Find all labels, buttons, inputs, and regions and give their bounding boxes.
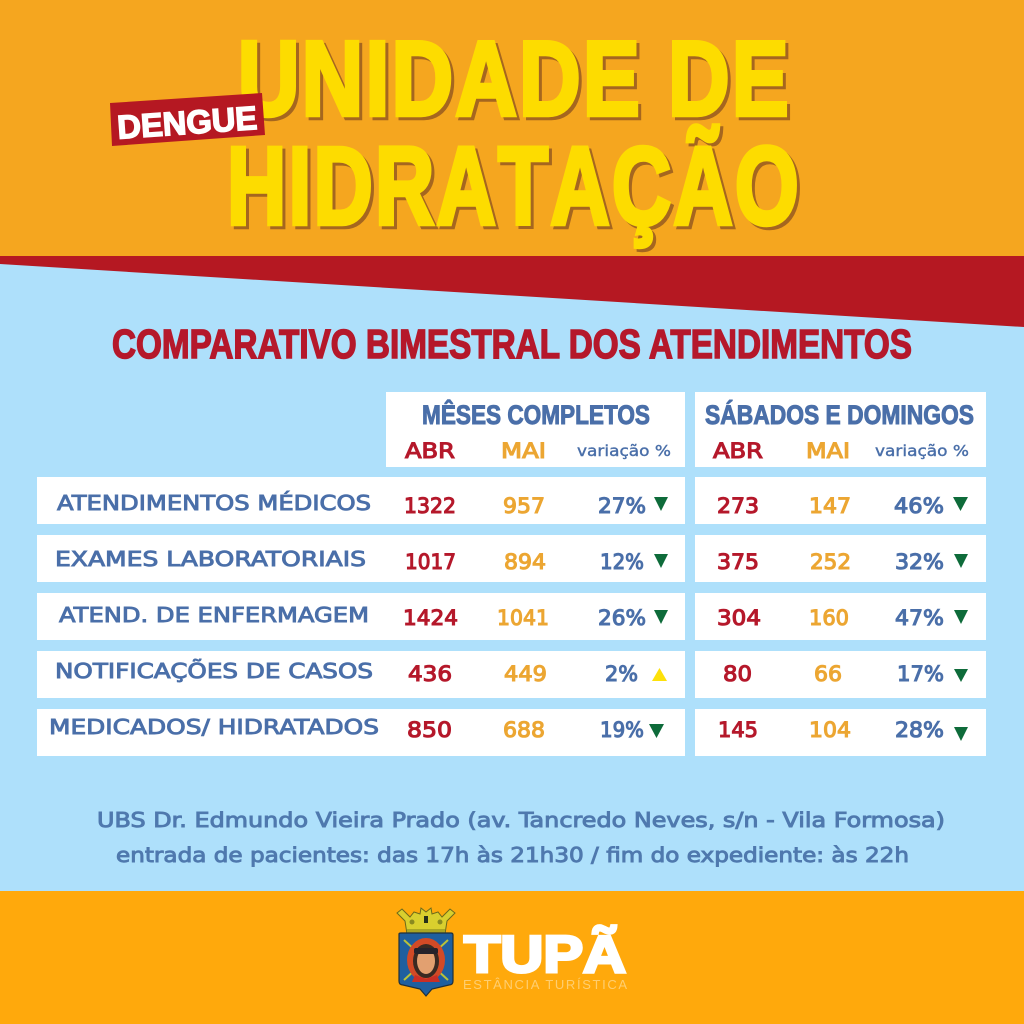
row: exames laboratoriais: 894: [504, 550, 546, 575]
table header: sabados e domingos: ABR: [713, 439, 763, 463]
address text: UBS Dr. Edmundo Vieira Prado (av. Tancredo Neves, s/n - Vila Formosa): [97, 808, 945, 832]
row: notificacoes de casos: 17%: [897, 662, 944, 687]
table header: meses completos: MAI: [501, 439, 546, 463]
row: atend. de enfermagem: 26%: [598, 606, 646, 631]
row: medicados hidratados: 104: [809, 718, 851, 743]
row: exames laboratoriais: 32%: [895, 550, 944, 575]
row: atend. de enfermagem: ATEND. DE ENFERMAGEM: [59, 603, 369, 627]
row: atend. de enfermagem: [37, 593, 986, 640]
row: atendimentos medicos: 273: [717, 494, 759, 519]
row: exames laboratoriais: 375: [717, 550, 759, 575]
title: UNIDADE DE HIDRATAÇÃO: [227, 20, 804, 251]
row: medicados hidratados: 688: [503, 718, 545, 743]
logo: TUPÃ wordmark: TUPÃ: [464, 925, 626, 984]
row: atend. de enfermagem: 1424: [403, 606, 458, 631]
row: exames laboratoriais: EXAMES LABORATORIAIS: [55, 547, 366, 571]
title: UNIDADE DE HIDRATAÇÃO: HIDRATAÇÃO: [230, 128, 804, 251]
row: medicados hidratados: 19%: [600, 718, 644, 743]
table header: meses completos: ABR: [405, 439, 455, 463]
row: atendimentos medicos: ATENDIMENTOS MÉDICOS: [57, 490, 371, 515]
row: atend. de enfermagem: 304: [717, 606, 761, 631]
row: medicados hidratados: [37, 709, 986, 756]
row: notificacoes de casos: 66: [814, 662, 842, 687]
table header: sabados e domingos: SÁBADOS E DOMINGOS: [705, 399, 974, 430]
row: notificacoes de casos: 80: [723, 662, 752, 687]
row: atendimentos medicos: 147: [809, 494, 851, 519]
logo: crown: [397, 908, 455, 934]
row: exames laboratoriais: 252: [810, 550, 851, 575]
row: notificacoes de casos: 436: [408, 662, 452, 687]
table header: sabados e domingos: MAI: [806, 439, 850, 463]
row: atendimentos medicos: 1322: [404, 494, 456, 519]
bottom orange band: [0, 891, 1024, 1024]
row: notificacoes de casos: [37, 651, 986, 698]
row: atend. de enfermagem: 160: [809, 606, 849, 631]
row: atendimentos medicos: [37, 477, 986, 524]
tag: DENGUE: DENGUE: [116, 99, 258, 146]
row: notificacoes de casos: NOTIFICAÇÕES DE CASOS: [55, 657, 373, 683]
table header: meses completos: [386, 392, 685, 467]
row: notificacoes de casos: 2%: [605, 662, 638, 687]
row: exames laboratoriais: [37, 535, 986, 582]
row: atend. de enfermagem: 1041: [497, 606, 549, 631]
row: notificacoes de casos: 449: [504, 662, 547, 687]
table header: meses completos: MÊSES COMPLETOS: [422, 399, 650, 430]
row: exames laboratoriais: 12%: [600, 550, 644, 575]
table header: sabados e domingos: variação %: [875, 442, 969, 460]
table header: meses completos: variação %: [577, 442, 671, 460]
table header: sabados e domingos: [695, 392, 986, 467]
row: medicados hidratados: 145: [718, 718, 758, 743]
row: medicados hidratados: MEDICADOS/ HIDRATADOS: [49, 715, 379, 739]
row: atend. de enfermagem: 47%: [895, 606, 944, 631]
red diagonal band: [0, 256, 1024, 327]
title: UNIDADE DE HIDRATAÇÃO: UNIDADE DE: [238, 20, 791, 138]
row: atendimentos medicos: 957: [503, 494, 545, 519]
row: exames laboratoriais: 1017: [405, 550, 456, 575]
row: medicados hidratados: 28%: [895, 718, 944, 743]
row: atendimentos medicos: 46%: [894, 494, 944, 519]
top orange header band: [0, 0, 1024, 257]
title: UNIDADE DE HIDRATAÇÃO: UNIDADE DE: [241, 23, 794, 141]
row: atendimentos medicos: 27%: [598, 494, 646, 519]
logo: estancia turistica: ESTÂNCIA TURÍSTICA: [463, 977, 627, 992]
logo: shield: [399, 933, 453, 996]
title: UNIDADE DE HIDRATAÇÃO: HIDRATAÇÃO: [227, 125, 801, 248]
hours text: entrada de pacientes: das 17h às 21h30 / fim do expediente: às 22h: [116, 843, 909, 867]
row: medicados hidratados: 850: [407, 718, 452, 743]
